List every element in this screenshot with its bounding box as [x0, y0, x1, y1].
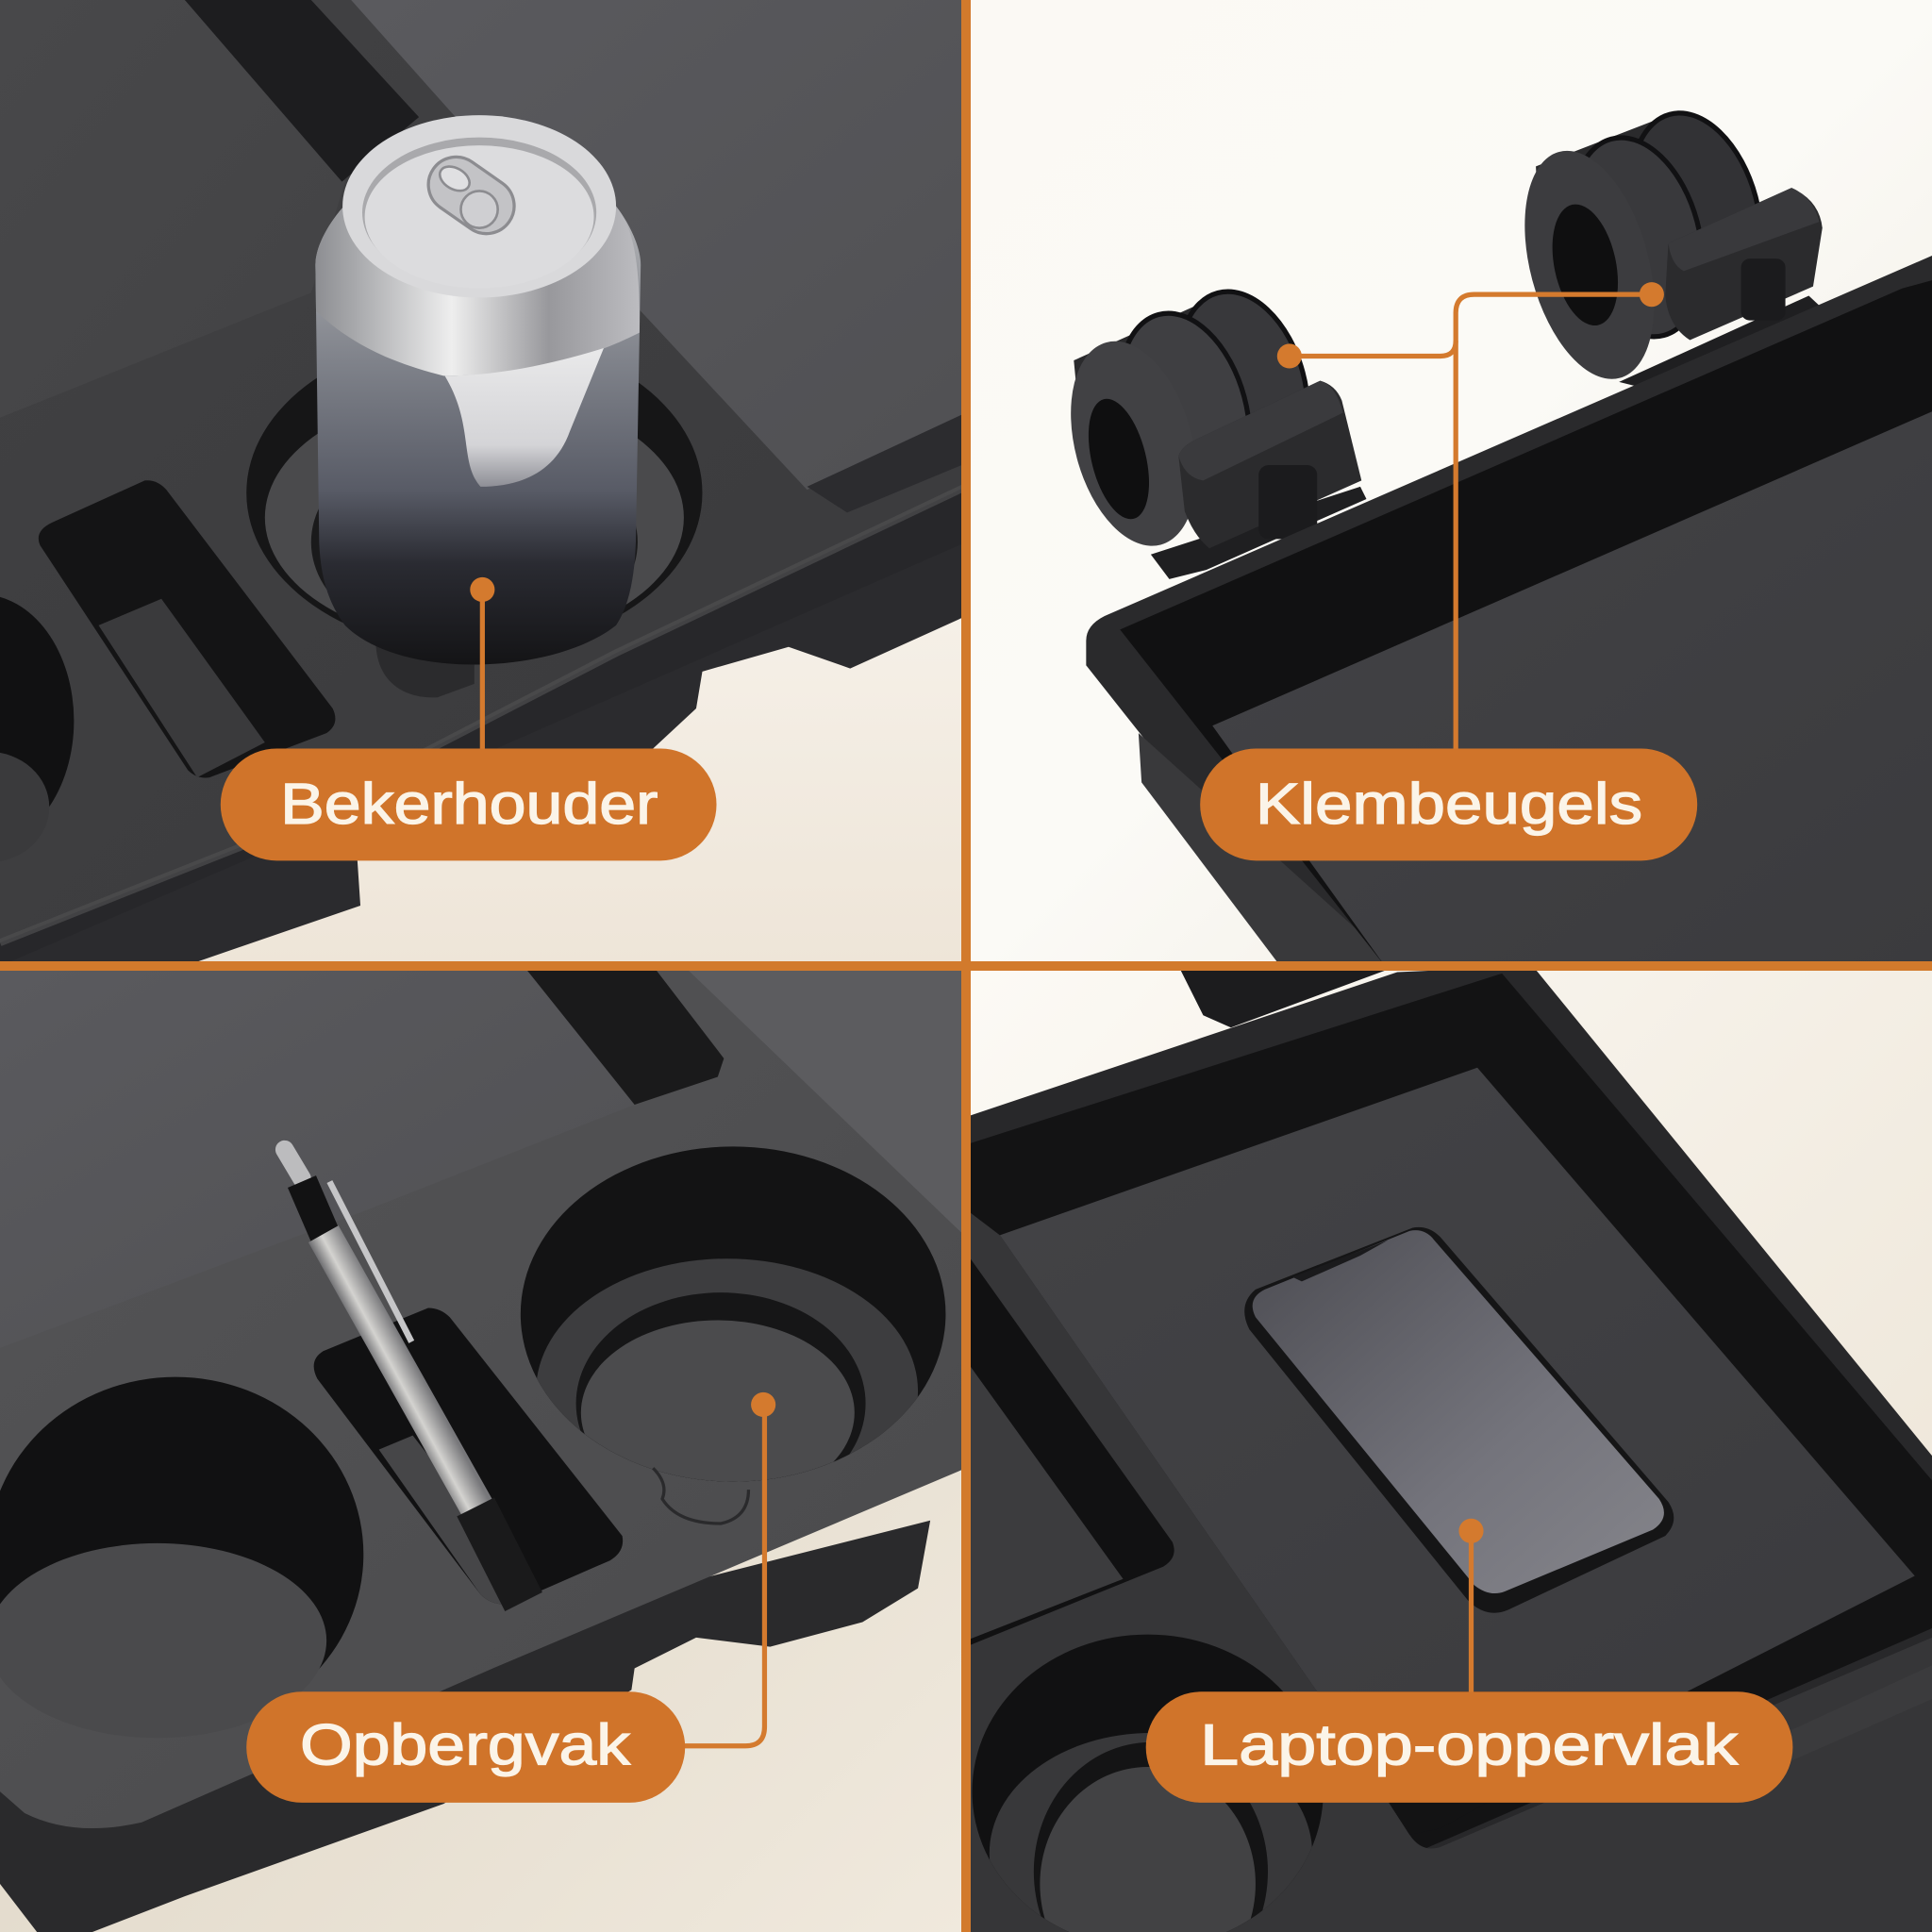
left cup hole: [0, 594, 74, 862]
label: Laptop-oppervlak: [1146, 1691, 1792, 1803]
tray outer frame: [966, 966, 1932, 1932]
tray side wall: [1139, 733, 1397, 966]
panel: Bekerhouder: [0, 0, 961, 961]
left clamp: [1050, 277, 1366, 579]
storage slot: [39, 480, 335, 777]
cup holder: [973, 1635, 1324, 1932]
laptop surface: [0, 966, 635, 1348]
connector lines and dots: [1277, 282, 1664, 751]
lower recess: [1317, 1691, 1687, 1835]
panel: Opbergvak: [0, 971, 961, 1932]
phone: [1244, 1227, 1674, 1613]
storage slot: [314, 1307, 623, 1605]
tray deck: [0, 966, 966, 1828]
laptop surface left: [0, 0, 345, 418]
edge recess: [808, 413, 966, 512]
deck with cup holder: [966, 1209, 1932, 1932]
inner wall: [966, 974, 1932, 1932]
tray underside and feet: [0, 1521, 930, 1932]
left cup holder: [0, 1377, 363, 1738]
tray outer frame: [1086, 256, 1932, 966]
label: Opbergvak: Opbergvak: [300, 1712, 630, 1777]
right clamp: [1502, 98, 1828, 393]
label: Opbergvak: [246, 1691, 685, 1803]
laptop surface right: [351, 0, 966, 490]
drink can: [315, 115, 641, 665]
pen: [285, 1150, 524, 1602]
panel: Laptop-oppervlak: [971, 971, 1932, 1932]
connector line and dot: [1458, 1519, 1484, 1694]
label: Klembeugels: Klembeugels: [1256, 772, 1642, 837]
tray underside and feet: [0, 468, 966, 966]
connector line and dot: [470, 577, 494, 751]
front lip highlight: [0, 487, 966, 942]
label: Laptop-oppervlak: Laptop-oppervlak: [1200, 1712, 1739, 1777]
right cup holder: [521, 1146, 945, 1524]
left trench: [966, 1253, 1174, 1647]
tray deck: [0, 0, 966, 942]
back right surface: [684, 966, 966, 1237]
label: Klembeugels: [1200, 748, 1697, 860]
inner wall: [1120, 280, 1932, 966]
panel: Klembeugels: [971, 0, 1932, 961]
cup hole: [246, 334, 702, 697]
label: Bekerhouder: [221, 748, 717, 860]
laptop floor: [1212, 411, 1932, 966]
connector line and dot: [683, 1392, 775, 1746]
front rim highlights: [1791, 1665, 1932, 1760]
laptop floor: [1000, 1068, 1915, 1691]
dark trench: [524, 966, 724, 1105]
label: Bekerhouder: Bekerhouder: [280, 772, 658, 837]
clamp remnant: [1178, 966, 1397, 1027]
dark trench: [185, 0, 419, 182]
